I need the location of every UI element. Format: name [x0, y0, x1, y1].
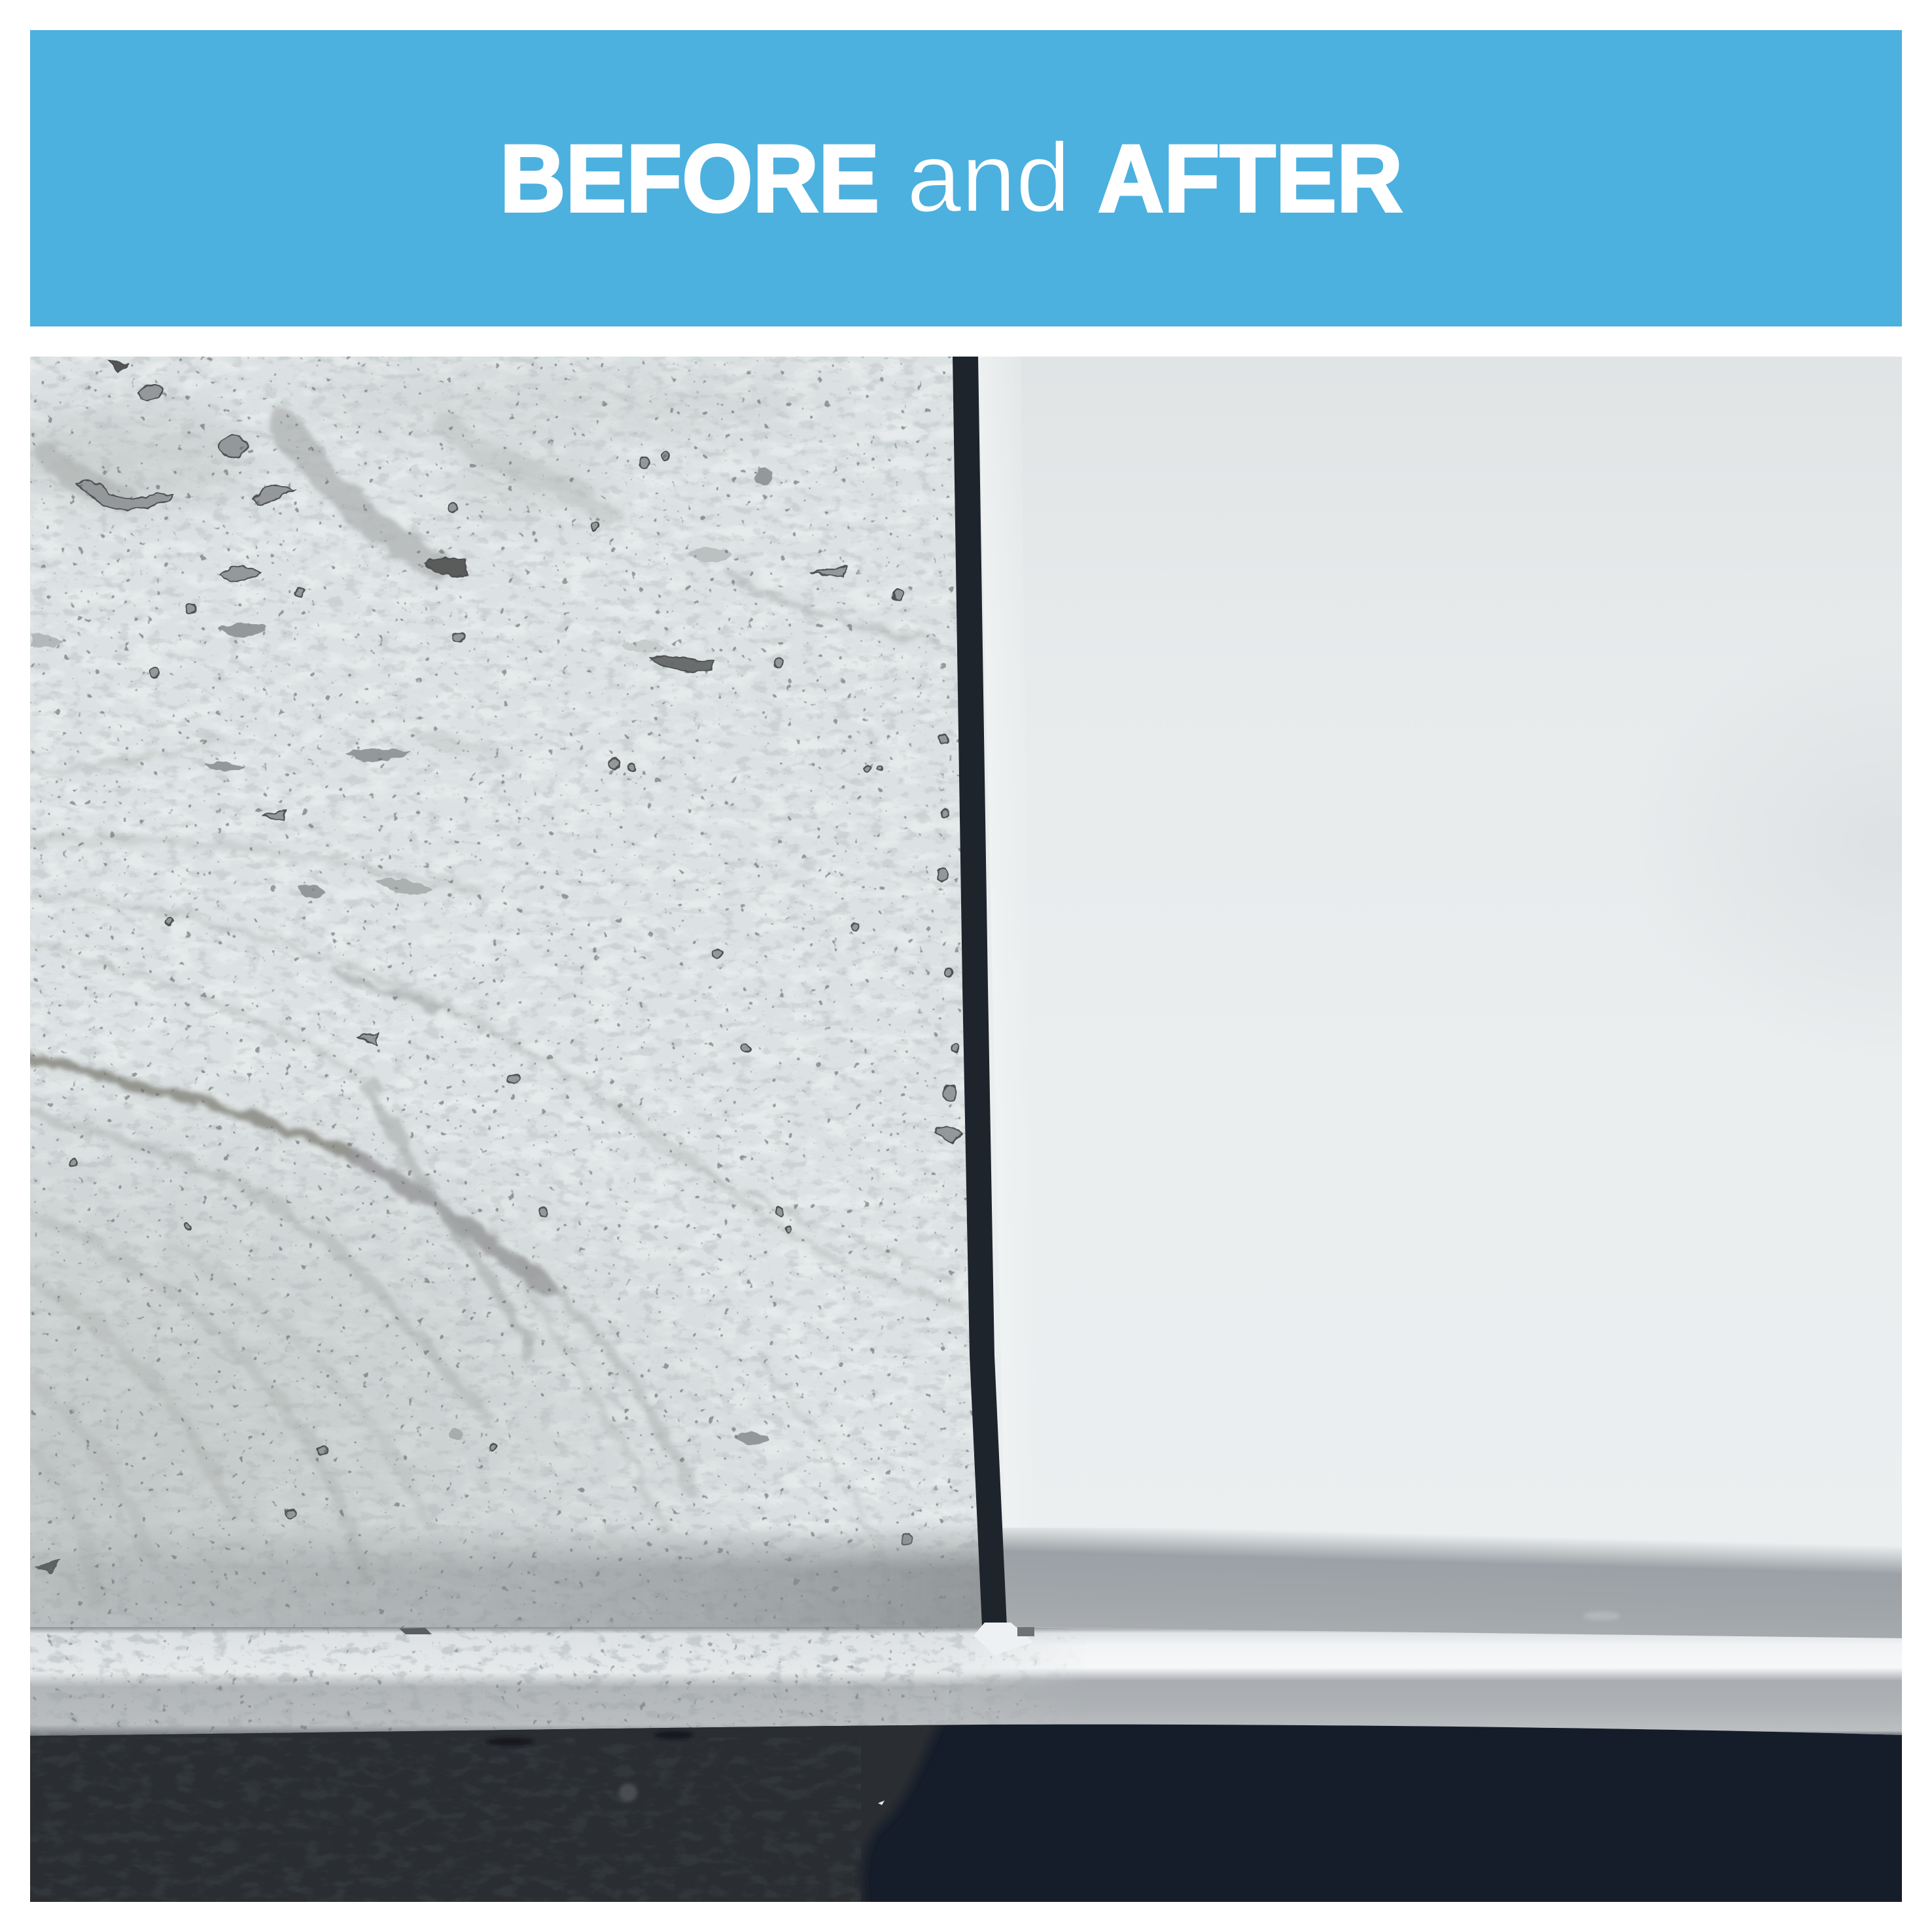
- dark ground below door: [24, 1714, 1902, 1908]
- dirt streaks: [31, 425, 961, 1602]
- title banner: [30, 30, 1902, 326]
- heading: BEFORE and AFTER: [500, 122, 1403, 232]
- large grey dirt areas: [30, 378, 762, 1627]
- shadow across lower left door: [30, 1524, 998, 1629]
- trim dirt texture: [30, 1627, 1090, 1735]
- door corner fitting on trim: [399, 1623, 1034, 1655]
- right rocker trim: [949, 1626, 1902, 1735]
- left door panel: before, dirty: [30, 357, 982, 1627]
- dirt blobs and specks: [31, 360, 961, 1572]
- heading: BEFORE and AFTER: AFTER: [1098, 125, 1403, 232]
- shadow across lower door: [981, 1528, 1902, 1640]
- right door panel: after, clean: [968, 357, 1932, 1640]
- textured shaded ground: [24, 1714, 942, 1908]
- heading: BEFORE and AFTER: and: [907, 122, 1070, 232]
- left rocker trim: dirty: [30, 1627, 1090, 1736]
- dark rubber door gap: [953, 357, 1007, 1626]
- heading: BEFORE and AFTER: BEFORE: [500, 125, 879, 232]
